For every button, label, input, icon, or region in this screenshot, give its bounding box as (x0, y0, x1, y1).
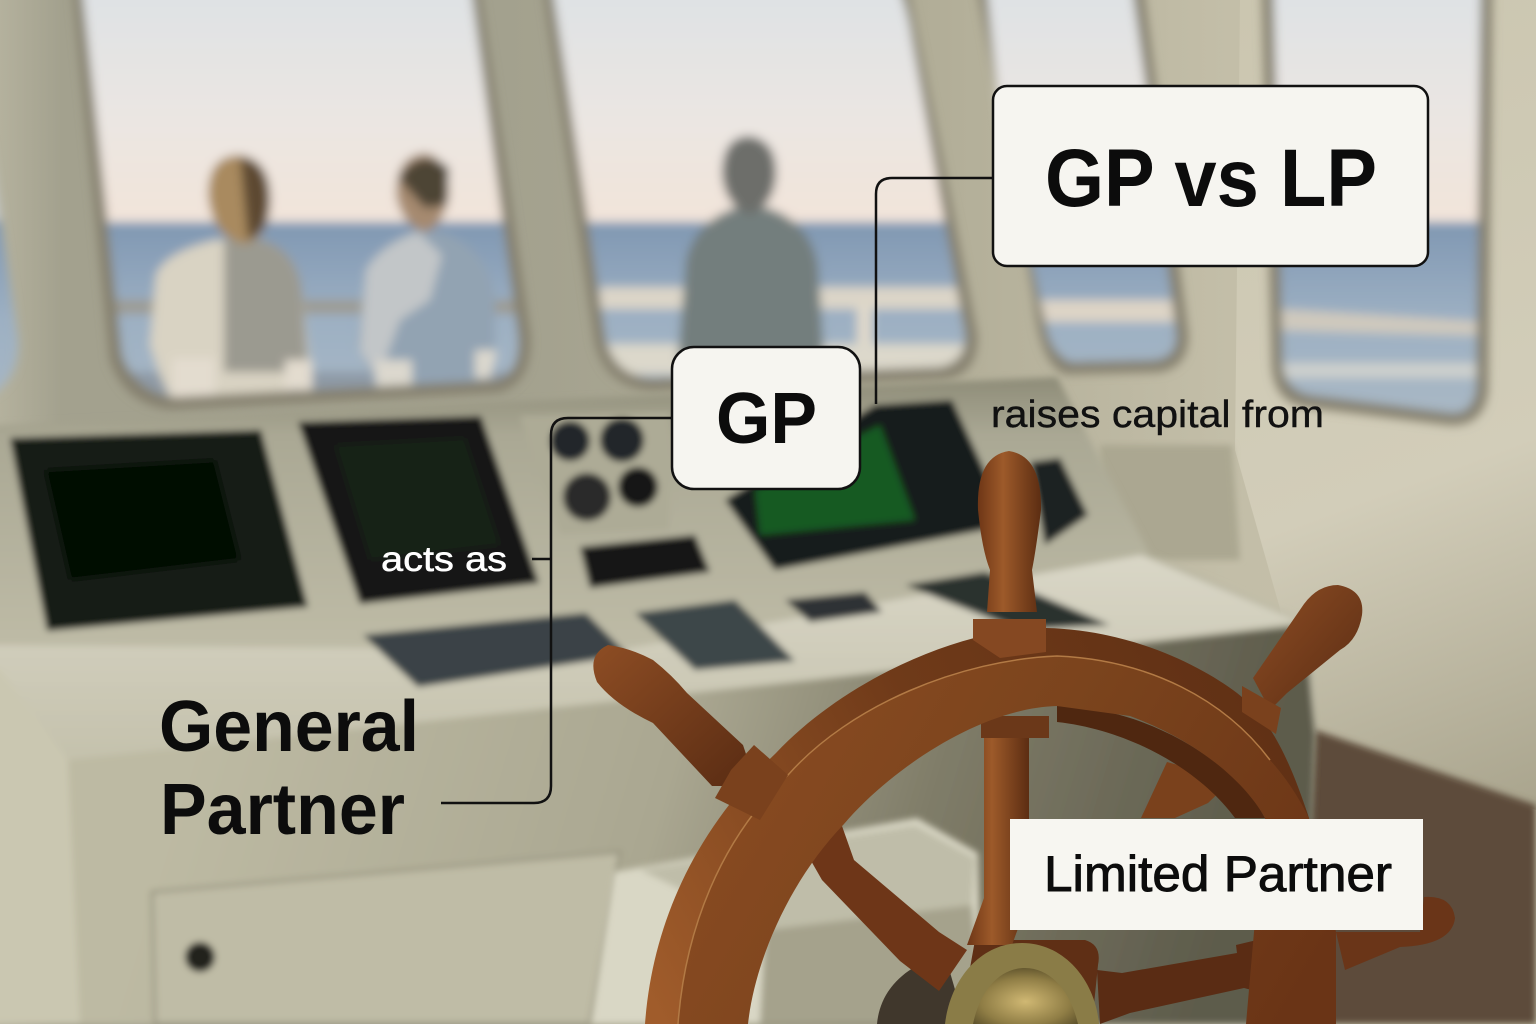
node: GP: GP (716, 379, 817, 459)
pedestal (591, 818, 985, 1024)
person 3 (678, 208, 824, 360)
dials (520, 412, 670, 535)
connector: GP to General Partner (441, 418, 672, 803)
top handle (973, 451, 1046, 658)
right handle (1242, 585, 1362, 734)
connector tick: acts as (532, 558, 551, 560)
wheel rim, back ring (645, 628, 1309, 1024)
left handle (593, 645, 788, 820)
right side wall (1235, 0, 1536, 810)
floor (1300, 730, 1536, 1024)
box: Limited Partner (1010, 819, 1423, 930)
label: raises capital from: raises capital from (991, 394, 1324, 436)
rim inner shadow (1057, 706, 1265, 818)
connector: GP vs LP to GP (876, 178, 993, 404)
title box: GP vs LP: GP vs LP (1045, 133, 1377, 224)
node: GP (672, 347, 860, 489)
person 2 (388, 233, 497, 384)
wheel spokes (806, 716, 1290, 1024)
title box: GP vs LP (993, 86, 1428, 266)
hub backing (877, 940, 1099, 1024)
screens (10, 430, 308, 631)
console (0, 377, 1315, 1024)
rim highlight (678, 656, 1270, 1024)
rear cabinet (1100, 445, 1240, 560)
wheel rim, front ring (678, 656, 1336, 1024)
label: acts as: acts as (381, 540, 507, 579)
label: General Partner: Partner (160, 770, 405, 850)
label: General Partner: General (159, 687, 419, 767)
brass hub (945, 943, 1099, 1024)
person 1 (150, 240, 312, 397)
lower right handle (1336, 897, 1455, 970)
view through windows (0, 0, 1492, 432)
box: Limited Partner: Limited Partner (1044, 846, 1392, 902)
icon: ship's wheel (593, 451, 1455, 1024)
